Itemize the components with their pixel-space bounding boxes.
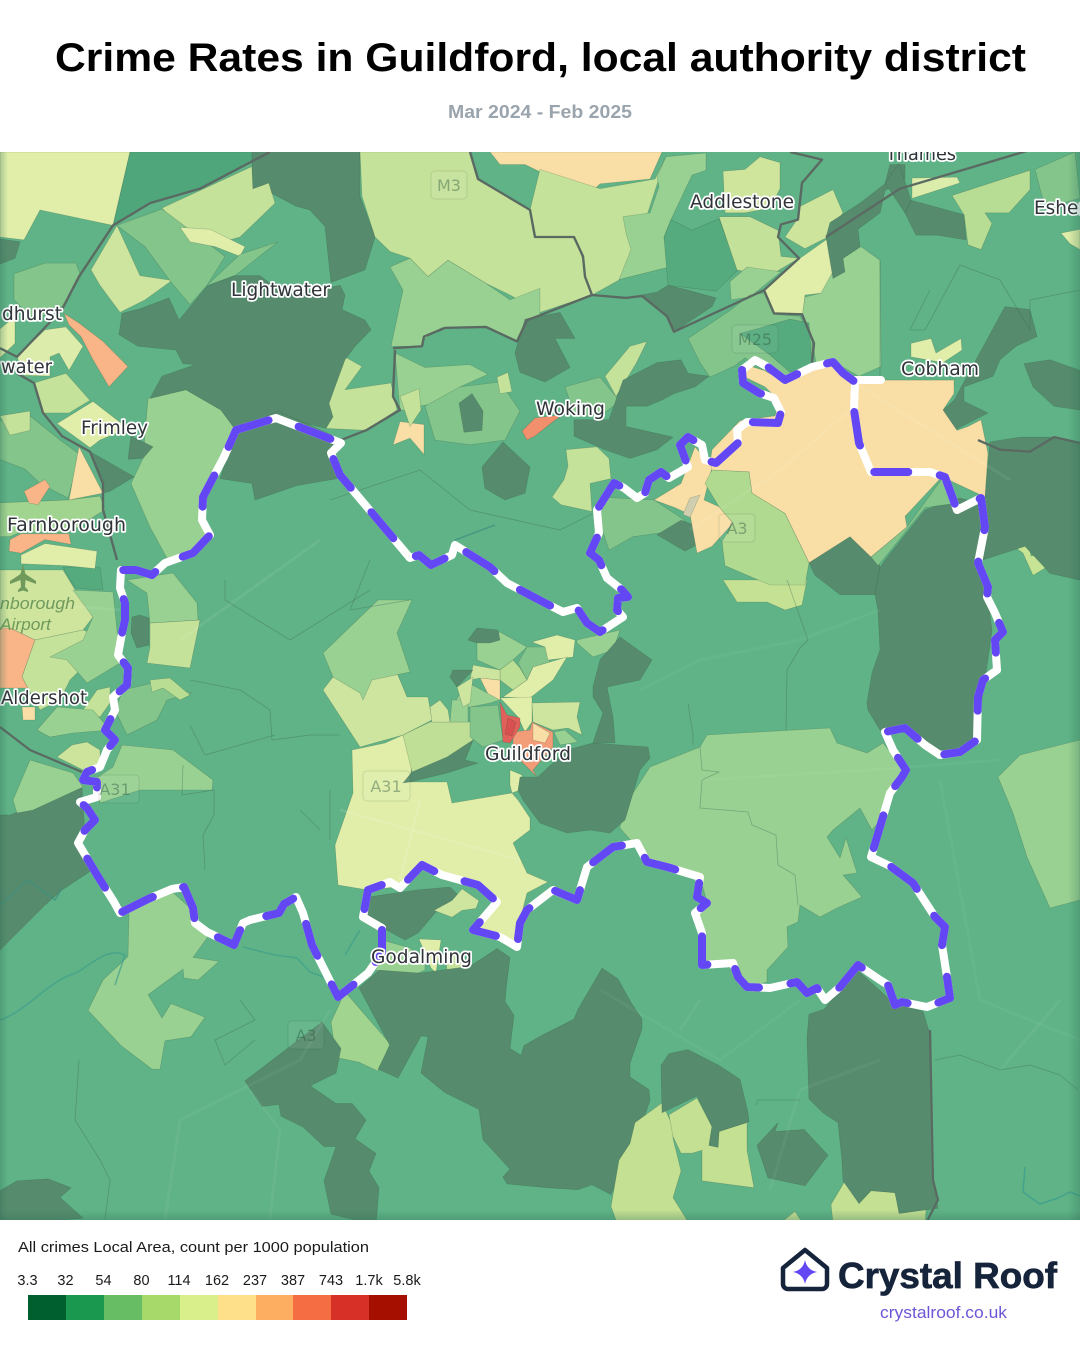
place labels: Thames bbox=[885, 143, 956, 165]
road badges: A3 bbox=[295, 1026, 317, 1045]
legend numbers: 1.7k bbox=[355, 1273, 383, 1289]
legend numbers: 5.8k bbox=[393, 1273, 421, 1289]
road badges: A3 bbox=[726, 519, 748, 538]
place labels: Lightwater bbox=[231, 279, 330, 301]
legend numbers: 114 bbox=[167, 1273, 191, 1289]
legend numbers: 743 bbox=[319, 1273, 343, 1289]
icon: house with star bbox=[783, 1250, 827, 1289]
road badges: M25 bbox=[738, 330, 772, 349]
south-west and south-east boundary lines bbox=[0, 727, 938, 1225]
subtitle: date range: Mar 2024 - Feb 2025 bbox=[448, 102, 632, 122]
map areas: direct central, east and south-west wards bbox=[0, 498, 1080, 988]
place labels: Farnborough bbox=[7, 514, 126, 536]
place labels: Aldershot bbox=[1, 687, 87, 709]
icon: airport plane bbox=[10, 564, 36, 592]
legend colour scale bbox=[28, 1295, 407, 1320]
place labels: Frimley bbox=[81, 417, 148, 439]
Woking orange area bbox=[522, 415, 562, 440]
place labels: Addlestone bbox=[690, 191, 794, 213]
title: Crime Rates in Guildford, local authority district bbox=[55, 36, 1026, 80]
district boundary: white line with purple dashes bbox=[78, 360, 1003, 1007]
legend numbers: 387 bbox=[281, 1273, 305, 1289]
county boundary lines bbox=[0, 150, 1080, 560]
place labels: Godalming bbox=[371, 946, 472, 968]
airport label bbox=[0, 595, 75, 634]
map areas: north wards and cream Ripley area bbox=[0, 150, 1080, 595]
legend numbers bbox=[17, 1273, 421, 1289]
legend numbers: 3.3 bbox=[17, 1273, 38, 1289]
place labels: Guildford bbox=[485, 743, 571, 765]
thin ward boundary lines bbox=[75, 260, 1080, 1220]
road badges bbox=[99, 171, 778, 1049]
map areas: south-east bbox=[611, 970, 938, 1228]
road badges: M3 bbox=[437, 176, 461, 195]
airport label: nborough bbox=[0, 595, 75, 613]
place labels: water bbox=[1, 356, 52, 378]
website link: crystalroof.co.uk bbox=[880, 1304, 1008, 1322]
map areas: south-west bbox=[0, 889, 650, 1225]
legend numbers: 32 bbox=[57, 1273, 74, 1289]
airport label: Airport bbox=[0, 616, 52, 634]
place labels: Cobham bbox=[901, 358, 979, 380]
legend numbers: 162 bbox=[205, 1273, 229, 1289]
map edge vignette bbox=[0, 152, 1080, 1220]
logo: Crystal Roof: Crystal Roof bbox=[838, 1255, 1058, 1296]
legend title: All crimes Local Area, count per 1000 population bbox=[18, 1240, 369, 1256]
rivers and roads bbox=[0, 380, 1080, 1220]
road badges: A31 bbox=[370, 777, 402, 796]
road badges: A31 bbox=[99, 780, 131, 799]
place labels: Woking bbox=[536, 398, 605, 420]
logo: Crystal Roof bbox=[783, 1250, 1058, 1296]
legend numbers: 54 bbox=[95, 1273, 112, 1289]
place labels bbox=[1, 143, 1080, 968]
legend numbers: 237 bbox=[243, 1273, 267, 1289]
place labels: dhurst bbox=[2, 303, 62, 325]
legend numbers: 80 bbox=[133, 1273, 150, 1289]
